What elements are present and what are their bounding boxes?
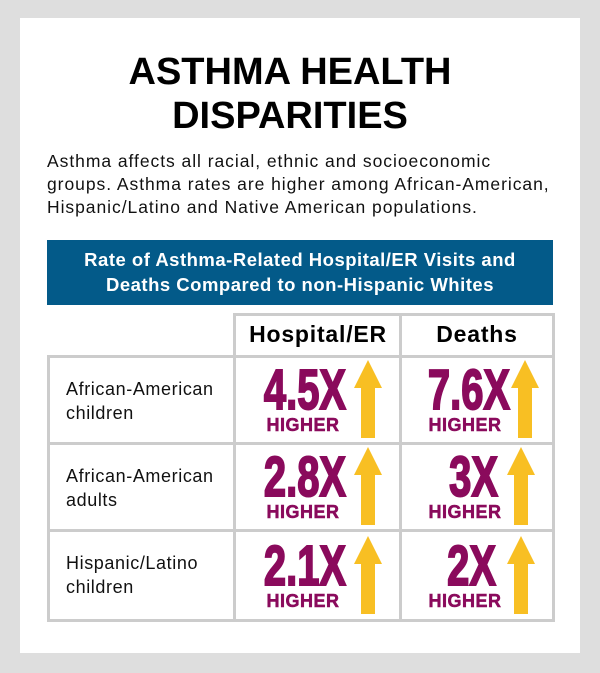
cell r2c2: 3X (449, 445, 498, 509)
row label 1: children (66, 403, 134, 423)
title (129, 51, 451, 137)
arrow (507, 447, 535, 525)
row label 2 (66, 466, 214, 510)
cell r1c2: 7.6X (428, 358, 510, 422)
banner: Rate of Asthma-Related Hospital/ER Visits and (84, 249, 516, 270)
arrow (354, 447, 382, 525)
title: DISPARITIES (172, 95, 408, 137)
cell r2c2 (428, 445, 535, 525)
intro text: Asthma affects all racial, ethnic and socioeconomic (47, 151, 491, 171)
row label 2: African-American (66, 466, 214, 486)
header: Deaths: Deaths (436, 321, 518, 347)
row label 1: African-American (66, 379, 214, 399)
row label 3: children (66, 577, 134, 597)
cell r1c1 (264, 358, 382, 438)
cell r1c2 (428, 358, 539, 438)
arrow (511, 360, 539, 438)
cell r2c1: 2.8X (264, 445, 346, 509)
cell r1c2: HIGHER (428, 415, 502, 435)
arrow (354, 360, 382, 438)
cell r2c2: HIGHER (428, 502, 502, 522)
cell r3c1: 2.1X (264, 534, 346, 598)
row label 3: Hispanic/Latino (66, 553, 198, 573)
cell r3c1 (264, 534, 382, 614)
cell r3c2: HIGHER (428, 591, 502, 611)
intro text (47, 151, 550, 217)
title: ASTHMA HEALTH (129, 51, 451, 93)
arrow (354, 536, 382, 614)
cell r2c1: HIGHER (266, 502, 340, 522)
banner (47, 240, 553, 305)
cell r3c2: 2X (447, 534, 496, 598)
table (47, 313, 555, 622)
cell r1c1: 4.5X (264, 358, 346, 422)
row label 2: adults (66, 490, 118, 510)
intro text: Hispanic/Latino and Native American populations. (47, 197, 478, 217)
cell r3c1: HIGHER (266, 591, 340, 611)
cell r1c1: HIGHER (266, 415, 340, 435)
cell r2c1 (264, 445, 382, 525)
row label 3 (66, 553, 198, 597)
row label 1 (66, 379, 214, 423)
banner: Deaths Compared to non-Hispanic Whites (106, 274, 494, 295)
cell r3c2 (428, 534, 535, 614)
arrow (507, 536, 535, 614)
intro text: groups. Asthma rates are higher among African-American, (47, 174, 550, 194)
header: Hospital/ER: Hospital/ER (249, 321, 387, 347)
